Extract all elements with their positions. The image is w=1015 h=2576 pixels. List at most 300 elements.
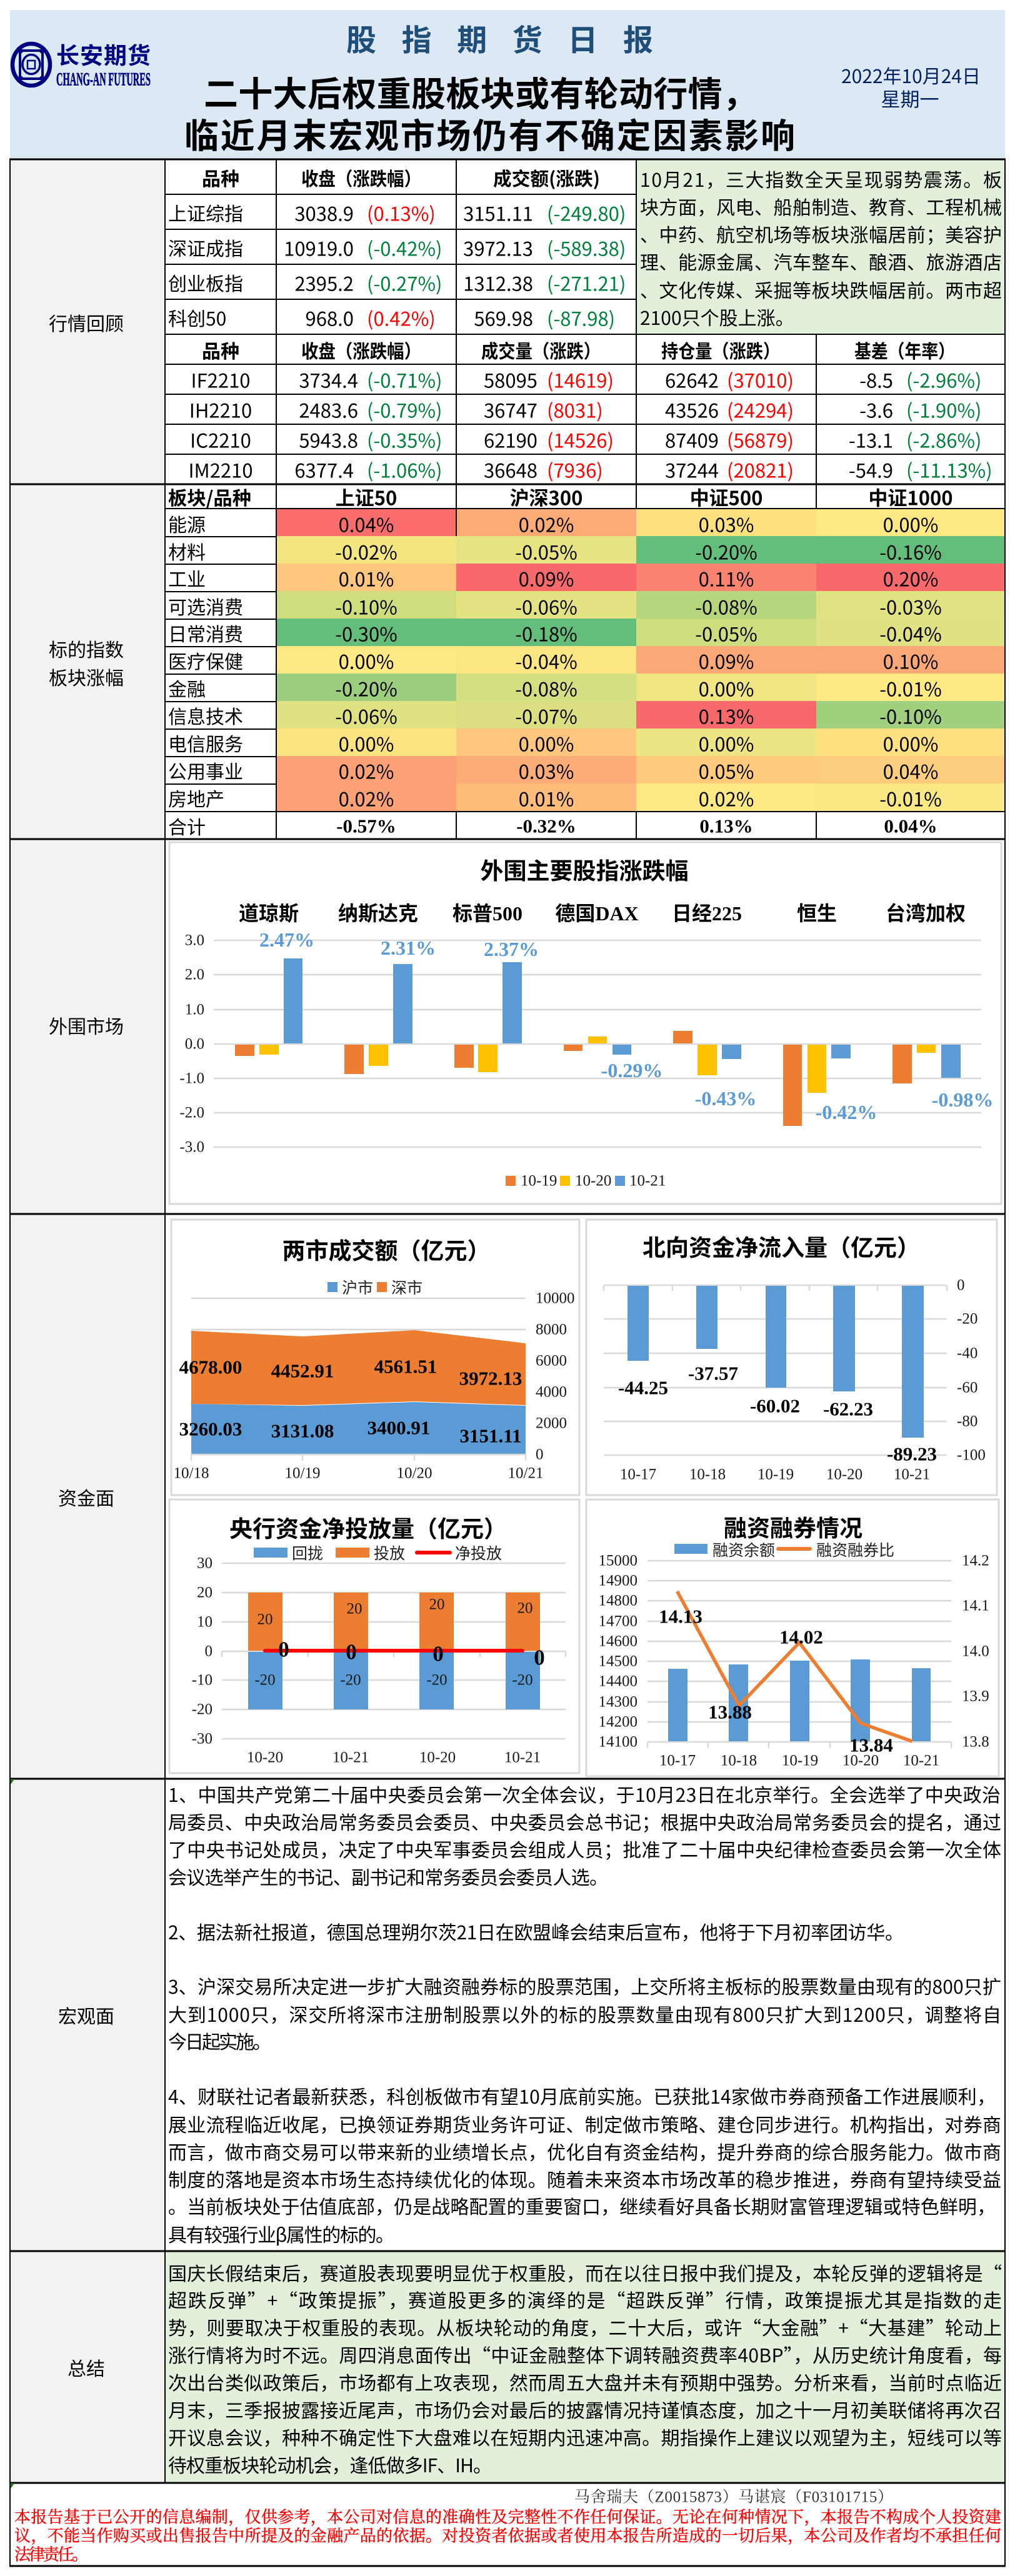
- table: indices rows: (-271.21): [547, 269, 626, 296]
- axis labels: 10-18: [689, 1466, 726, 1483]
- legend: 回拢: [292, 1541, 323, 1564]
- data labels: 0: [432, 1642, 444, 1666]
- disclaimer: 法律责任。: [14, 2542, 88, 2565]
- table: futures header: 品种: [202, 336, 239, 364]
- data labels: 13.84: [849, 1734, 893, 1756]
- heatmap row labels: 材料: [168, 537, 206, 565]
- legend: 净投放: [455, 1541, 502, 1564]
- table: indices rows: 上证综指: [168, 199, 243, 226]
- table: indices header: 收盘（涨跌幅）: [301, 164, 421, 191]
- summary text: 超跌反弹”+“政策提振”，赛道股更多的演绎的是“超跌反弹”行情，政策提振尤其是指数的走: [168, 2285, 1002, 2313]
- heatmap values: 0.10%: [883, 646, 938, 675]
- axis labels: 14100: [599, 1733, 638, 1751]
- bar chart: PBOC net injection: [169, 1499, 579, 1773]
- heatmap row labels: 能源: [168, 510, 206, 537]
- axis labels: -20: [192, 1701, 212, 1718]
- category labels: 台湾加权: [886, 902, 966, 925]
- axis labels: 14600: [599, 1633, 638, 1649]
- axis labels: 15000: [599, 1552, 638, 1569]
- legend: [328, 1276, 422, 1298]
- heatmap values: -0.08%: [515, 674, 578, 702]
- heatmap row labels: 工业: [168, 564, 206, 592]
- axis labels: 10-20: [826, 1466, 862, 1483]
- legend: [674, 1538, 894, 1561]
- table: indices rows: (-589.38): [547, 234, 626, 261]
- heatmap totals: 0.13%: [699, 815, 753, 837]
- panel: market review: [49, 159, 1005, 839]
- disclaimer: [14, 2504, 1001, 2565]
- axis labels: 0: [957, 1277, 965, 1293]
- legend: 10-19: [521, 1172, 557, 1190]
- heatmap row labels: 公用事业: [168, 757, 243, 784]
- table: indices rows: [168, 199, 626, 331]
- heatmap values: -0.16%: [879, 537, 942, 565]
- data labels: [618, 1362, 937, 1465]
- ratio line: [678, 1591, 912, 1741]
- data labels: -0.29%: [601, 1059, 662, 1082]
- axis labels: [599, 1552, 989, 1769]
- data labels: 20: [518, 1599, 532, 1617]
- data labels: -0.42%: [816, 1101, 877, 1123]
- heatmap values: 0.13%: [699, 701, 754, 730]
- heatmap values: 0.00%: [339, 729, 394, 757]
- heatmap values: 0.00%: [883, 729, 938, 757]
- axis labels: 10-21: [332, 1749, 369, 1766]
- area chart: two-market turnover: [171, 1220, 579, 1495]
- table: futures rows: (-2.96%): [906, 365, 981, 394]
- table: futures rows: 3734.4: [299, 365, 358, 394]
- legend: [506, 1172, 666, 1190]
- macro news text: 2、据法新社报道，德国总理朔尔茨21日在欧盟峰会结束后宣布，他将于下月初率团访华。: [168, 1917, 904, 1945]
- data labels: 2.31%: [381, 937, 436, 959]
- section label: sector moves: 标的指数: [49, 635, 124, 662]
- panel: sector heatmap: [49, 482, 1005, 840]
- market commentary: 10月21，三大指数全天呈现弱势震荡。板: [640, 165, 1002, 192]
- axis labels: 0: [536, 1446, 544, 1463]
- disclaimer: 议，不能当作购买或出售报告中所提及的金融产品的依据。对投资者依据或者使用本报告所造成的一切后果，本公司及作者均不承担任何: [14, 2523, 1001, 2547]
- heatmap row labels: 医疗保健: [168, 647, 243, 674]
- data labels: 4678.00: [179, 1356, 242, 1378]
- axis labels: 10-21: [894, 1466, 930, 1483]
- table: indices header: 品种: [202, 164, 239, 191]
- macro news text: 大到1000只，深交所将深市注册制股票以外的标的股票数量由现有800只扩大到1200只，调整将自: [168, 2000, 1001, 2027]
- heatmap values: 0.00%: [699, 729, 754, 757]
- summary text: [168, 2259, 1002, 2478]
- axis labels: 10/21: [508, 1465, 543, 1482]
- axis labels: 14300: [599, 1693, 638, 1711]
- panel: footer: [14, 2488, 1001, 2565]
- section label: macro: 宏观面: [58, 2001, 114, 2029]
- axis labels: 14.1: [962, 1597, 989, 1614]
- heatmap row labels: 房地产: [168, 784, 224, 812]
- category labels: 日经225: [672, 902, 742, 925]
- data labels: 3131.08: [271, 1420, 334, 1442]
- axis labels: 10-20: [842, 1752, 879, 1769]
- table: futures rows: (-1.06%): [367, 455, 442, 484]
- axis labels: 2000: [536, 1415, 567, 1432]
- data labels: -20: [340, 1672, 361, 1688]
- summary text: 待权重板块轮动机会，逢低做多IF、IH。: [168, 2450, 492, 2478]
- heatmap row labels: [168, 510, 243, 840]
- axis labels: -80: [957, 1413, 978, 1430]
- market commentary: 、中药、航空机场等板块涨幅居前；美容护: [640, 220, 1002, 247]
- y axis labels: 3.0: [185, 932, 204, 948]
- axis labels: 0: [205, 1643, 212, 1659]
- heatmap values: -0.30%: [335, 619, 398, 647]
- axis labels: 10-20: [419, 1749, 456, 1766]
- axis labels: 10-17: [620, 1466, 656, 1483]
- table: futures rows: -3.6: [859, 395, 893, 424]
- table: futures header: [202, 336, 955, 364]
- axis labels: 10-19: [758, 1466, 794, 1483]
- table: indices rows: 科创50: [168, 304, 226, 331]
- data labels: -20: [426, 1672, 448, 1688]
- heatmap values: 0.02%: [699, 783, 754, 812]
- market commentary: 理、能源金属、汽车整车、酿酒、旅游酒店: [640, 247, 1002, 275]
- macro news text: 4、财联社记者最新获悉，科创板做市有望10月底前实施。已获批14家做市券商预备工作进展顺利，: [168, 2082, 996, 2109]
- axis labels: 20: [197, 1584, 212, 1601]
- market commentary: 2100只个股上涨。: [640, 303, 794, 331]
- category labels: 纳斯达克: [338, 902, 418, 925]
- axis labels: -40: [957, 1345, 978, 1362]
- table: futures rows: -54.9: [849, 455, 893, 484]
- heatmap values: -0.01%: [879, 674, 942, 702]
- data labels: [259, 928, 993, 1123]
- macro news text: [168, 1780, 1001, 2247]
- heatmap values: -0.03%: [879, 592, 942, 620]
- data labels: [254, 1596, 545, 1688]
- legend: [254, 1541, 502, 1564]
- macro news text: 局委员、中央政治局常务委员会委员、中央委员会总书记；根据中央政治局常务委员会的提名，通过: [168, 1808, 1001, 1835]
- data labels: 2.47%: [259, 928, 314, 951]
- y axis labels: 2.0: [185, 966, 204, 983]
- axis labels: 14400: [599, 1673, 638, 1689]
- disclaimer: 本报告基于已公开的信息编制，仅供参考，本公司对信息的准确性及完整性不作任何保证。无论在何种情况下，本报告不构成个人投资建: [14, 2504, 1001, 2528]
- icon: Chang-An Futures logo: [12, 37, 151, 90]
- data labels: 0: [278, 1637, 289, 1662]
- axis labels: 13.8: [962, 1733, 989, 1751]
- data labels: 4452.91: [271, 1360, 334, 1382]
- axis labels: 10/19: [285, 1465, 320, 1482]
- table: futures rows: IF2210: [191, 365, 251, 394]
- axis labels: 10/20: [397, 1465, 432, 1482]
- data labels: [179, 1356, 522, 1447]
- heatmap totals: [336, 815, 938, 837]
- axis labels: [620, 1277, 986, 1483]
- report title: 股指期货日报: [346, 16, 653, 59]
- table: futures rows: 62642: [665, 365, 719, 394]
- axis labels: 14.2: [962, 1552, 989, 1569]
- table: futures rows: (14619): [547, 365, 614, 394]
- data labels: -0.98%: [932, 1088, 993, 1111]
- table: futures rows: 36648: [484, 455, 538, 484]
- bars 10-19: [235, 1031, 912, 1126]
- table: futures rows: (14526): [547, 425, 614, 454]
- date: [841, 61, 981, 112]
- heatmap values: -0.06%: [515, 592, 578, 620]
- heatmap row labels: 金融: [168, 674, 206, 702]
- table: futures rows: [188, 365, 992, 484]
- table: indices rows: (-0.27%): [367, 269, 442, 296]
- heatmap values: 0.02%: [339, 756, 394, 785]
- left column background: [10, 159, 165, 2483]
- heatmap values: -0.02%: [335, 537, 398, 565]
- market commentary: 块方面，风电、船舶制造、教育、工程机械: [640, 192, 1002, 220]
- macro news text: 。当前板块处于估值底部，仍是战略配置的重要窗口，继续看好具备长期财富管理逻辑或特色鲜明，: [168, 2192, 996, 2219]
- table: futures rows: IC2210: [190, 425, 251, 454]
- heatmap totals: -0.57%: [336, 815, 396, 837]
- section label: overseas markets: 外围市场: [49, 1012, 124, 1039]
- axis labels: 14200: [599, 1713, 638, 1731]
- axis labels: 14700: [599, 1613, 638, 1629]
- axis labels: -10: [192, 1672, 212, 1688]
- heatmap values: -0.01%: [879, 783, 942, 812]
- table: indices rows: 3972.13: [463, 234, 533, 261]
- table: indices rows: 1312.38: [463, 269, 533, 296]
- data labels: 13.88: [708, 1701, 752, 1723]
- macro news text: 具有较强行业β属性的标的。: [168, 2220, 394, 2247]
- summary text: 次出台类似政策后，市场都有上攻表现，然而周五大盘并未有预期中强势。分析来看，当前时点临近: [168, 2368, 1002, 2395]
- macro news text: 了中央书记处成员，决定了中央军事委员会组成人员；批准了二十届中央纪律检查委员会第一次全体: [168, 1835, 1001, 1862]
- heatmap values: 0.09%: [699, 646, 754, 675]
- table: futures header: 持仓量（涨跌）: [661, 336, 780, 364]
- heatmap values: 0.20%: [883, 564, 938, 592]
- table: indices rows: (-0.42%): [367, 234, 442, 261]
- table: futures rows: (8031): [547, 395, 603, 424]
- macro news text: 而言，做市商交易可以带来新的业绩增长点，优化自有资金结构，提升券商的综合服务能力。做市商: [168, 2137, 1001, 2165]
- category labels: 德国DAX: [555, 902, 639, 925]
- heatmap values: -0.05%: [515, 537, 578, 565]
- axis labels: 10-18: [721, 1752, 757, 1769]
- axis labels: -20: [957, 1311, 978, 1327]
- table: indices rows: 2395.2: [294, 269, 354, 296]
- chart title: 外围主要股指涨跌幅: [480, 852, 689, 886]
- table: futures rows: 37244: [665, 455, 719, 484]
- table: indices rows: 3038.9: [294, 199, 354, 226]
- table: futures header: 收盘（涨跌幅）: [301, 336, 421, 364]
- section label: capital: 资金面: [58, 1483, 114, 1511]
- heatmap values: 0.09%: [519, 564, 574, 592]
- legend: 沪市: [342, 1276, 373, 1298]
- axis labels: 4000: [536, 1383, 567, 1401]
- table: futures rows: 6377.4: [294, 455, 354, 484]
- legend: 10-21: [629, 1172, 666, 1190]
- data labels: 4561.51: [374, 1356, 437, 1377]
- table: futures rows: 62190: [484, 425, 538, 454]
- data labels: -20: [512, 1672, 533, 1688]
- bars 10-20: [259, 1037, 936, 1093]
- chart title: 北向资金净流入量（亿元）: [642, 1229, 920, 1263]
- axis labels: 8000: [536, 1321, 567, 1338]
- axis labels: 10-20: [247, 1749, 283, 1766]
- y axis labels: 1.0: [185, 1001, 204, 1018]
- table: indices rows: 968.0: [306, 304, 354, 331]
- bars: [668, 1659, 931, 1741]
- chart title: 两市成交额（亿元）: [282, 1232, 490, 1266]
- panel: overseas markets: [49, 842, 1001, 1204]
- table: futures rows: -8.5: [859, 365, 893, 394]
- table: indices rows: 深证成指: [168, 234, 243, 261]
- heatmap values: 0.00%: [699, 674, 754, 702]
- table: indices rows: 10919.0: [284, 234, 354, 261]
- data labels: 20: [258, 1611, 272, 1628]
- bars 10-21: [284, 958, 961, 1078]
- axis labels: 14800: [599, 1592, 638, 1609]
- macro news text: 展业流程临近收尾，已换领证券期货业务许可证、制定做市策略、建仓同步进行。机构指出，对券商: [168, 2110, 1001, 2137]
- table: futures rows: (7936): [547, 455, 603, 484]
- data labels: -20: [254, 1672, 276, 1688]
- section label: sector moves: 板块涨幅: [49, 663, 124, 690]
- blue bars: [248, 1652, 540, 1709]
- axis labels: -30: [192, 1731, 212, 1747]
- y axis labels: -1.0: [179, 1070, 204, 1087]
- header banner: CHANG-AN FUTURES: [56, 69, 151, 90]
- heatmap row labels: 信息技术: [168, 702, 243, 729]
- table: futures rows: -13.1: [849, 425, 893, 454]
- table: indices rows: (0.13%): [367, 199, 436, 226]
- heatmap header: 沪深300: [510, 482, 582, 511]
- data labels: -89.23: [887, 1443, 937, 1465]
- table: indices rows: 3151.11: [463, 199, 533, 226]
- macro news text: 3、沪深交易所决定进一步扩大融资融券标的股票范围，上交所将主板标的股票数量由现有的800只扩: [168, 1972, 1001, 1999]
- axis labels: -100: [957, 1447, 986, 1463]
- axis labels: 10/18: [174, 1465, 209, 1482]
- combo chart: margin financing: [586, 1499, 999, 1776]
- section label: sector moves: [49, 635, 124, 690]
- orange bars: [248, 1593, 540, 1651]
- axis labels: 14500: [599, 1653, 638, 1669]
- table: futures rows: 58095: [484, 365, 538, 394]
- heatmap header: 中证1000: [868, 482, 953, 511]
- data labels: [659, 1606, 893, 1756]
- heatmap row labels: 电信服务: [168, 729, 243, 757]
- heatmap values: 0.02%: [519, 510, 574, 537]
- summary text: 国庆长假结束后，赛道股表现要明显优于权重股，而在以往日报中我们提及，本轮反弹的逻辑将是“: [168, 2259, 1002, 2286]
- heatmap cells: [165, 509, 1005, 839]
- summary text: 势，则要取决于权重股的表现。从板块轮动的角度，二十大后，或许“大金融”+“大基建”轮动上: [168, 2313, 1002, 2340]
- heatmap values: 0.03%: [519, 756, 574, 785]
- axis labels: 10000: [536, 1290, 575, 1307]
- heatmap totals: -0.32%: [516, 815, 576, 837]
- data labels: -62.23: [823, 1398, 873, 1420]
- table: futures rows: (-0.35%): [367, 425, 442, 454]
- axis labels: -60: [957, 1380, 978, 1396]
- chart title: 融资融券情况: [724, 1509, 862, 1543]
- heatmap values: -0.07%: [515, 701, 578, 730]
- table: indices header: 成交额(涨跌): [493, 164, 600, 191]
- table: futures rows: 2483.6: [299, 395, 358, 424]
- table: futures rows: (20821): [727, 455, 794, 484]
- macro news text: 制度的落地是资本市场生态持续优化的体现。随着未来资本市场改革的稳步推进，券商有望持续受益: [168, 2165, 1001, 2192]
- heatmap values: 0.03%: [699, 510, 754, 537]
- heatmap row labels: 合计: [168, 812, 206, 840]
- category labels: 恒生: [797, 902, 837, 925]
- table: indices rows: (-87.98): [547, 304, 615, 331]
- heatmap values: 0.04%: [883, 756, 938, 785]
- heatmap values: -0.18%: [515, 619, 578, 647]
- bar chart: overseas index moves: [169, 842, 1001, 1204]
- heatmap values: 0.00%: [339, 646, 394, 675]
- macro news text: 1、中国共产党第二十届中央委员会第一次全体会议，于10月23日在北京举行。全会选举了中央政治: [168, 1780, 1001, 1808]
- section label: summary: 总结: [68, 2354, 105, 2381]
- table: futures header: 基差（年率）: [854, 336, 955, 364]
- heatmap row labels: 日常消费: [168, 619, 243, 647]
- y axis labels: 0.0: [185, 1036, 204, 1052]
- data labels: -0.43%: [695, 1087, 756, 1110]
- axis labels: 14.0: [962, 1643, 989, 1659]
- summary text: 月末，三季报披露接近尾声，市场仍会对最后的披露情况持谨慎态度，加之十一月初美联储将再次召: [168, 2395, 1002, 2423]
- heatmap values: -0.10%: [335, 592, 398, 620]
- macro news text: 今日起实施。: [168, 2027, 271, 2054]
- panel: summary: [68, 2251, 1005, 2483]
- panel: capital flows: [58, 1220, 999, 1776]
- category labels: 道琼斯: [239, 902, 299, 925]
- table: futures rows: (56879): [727, 425, 794, 454]
- table: indices header: [202, 164, 600, 191]
- authors: 马舍瑞夫（Z0015873）马谌宸（F03101715）: [574, 2488, 893, 2505]
- category labels: [239, 902, 966, 925]
- market commentary: [640, 165, 1002, 331]
- table: futures rows: (24294): [727, 395, 794, 424]
- data labels: 3400.91: [368, 1417, 430, 1438]
- section label: market review: 行情回顾: [49, 309, 124, 336]
- bars: [628, 1286, 924, 1438]
- table: indices rows: 569.98: [474, 304, 533, 331]
- bar chart: northbound net inflow: [586, 1220, 997, 1495]
- heatmap values: -0.04%: [515, 646, 578, 675]
- table: futures rows: IM2210: [188, 455, 253, 484]
- heatmap row labels: 可选消费: [168, 592, 243, 620]
- axis labels: [192, 1554, 541, 1766]
- table: futures rows: (37010): [727, 365, 794, 394]
- heatmap values: -0.20%: [335, 674, 398, 702]
- axis labels: 10: [197, 1613, 212, 1631]
- date: 星期一: [881, 84, 939, 112]
- table: futures rows: 43526: [665, 395, 719, 424]
- axis labels: 10-21: [504, 1749, 541, 1766]
- y axis labels: -2.0: [179, 1105, 204, 1121]
- table: futures rows: (-2.86%): [906, 425, 981, 454]
- legend: 10-20: [575, 1172, 611, 1190]
- table: futures rows: (-0.71%): [367, 365, 442, 394]
- heatmap header: 板块/品种: [168, 483, 251, 510]
- legend: 融资融券比: [816, 1538, 894, 1561]
- table: futures rows: (-11.13%): [906, 455, 992, 484]
- heatmap values: 0.11%: [699, 564, 754, 592]
- heatmap values: [335, 510, 942, 812]
- legend: 深市: [391, 1276, 422, 1298]
- data labels: 3151.11: [459, 1425, 522, 1447]
- table: futures rows: (-1.90%): [906, 395, 981, 424]
- summary text: 开议息会议，种种不确定性下大盘难以在短期内迅速冲高。期指操作上建议以观望为主，短线可以等: [168, 2423, 1002, 2450]
- data labels: -44.25: [618, 1377, 668, 1398]
- heatmap header: [168, 482, 953, 511]
- heatmap values: -0.05%: [695, 619, 758, 647]
- axis labels: 13.9: [962, 1688, 989, 1704]
- headline: 临近月末宏观市场仍有不确定因素影响: [184, 108, 795, 158]
- axis labels: [174, 1290, 575, 1482]
- axis labels: 30: [197, 1554, 212, 1572]
- table: futures rows: 36747: [484, 395, 538, 424]
- heatmap values: 0.01%: [339, 564, 394, 592]
- heatmap values: 0.05%: [699, 756, 754, 785]
- data labels: 14.02: [779, 1626, 823, 1648]
- table: indices rows: 创业板指: [168, 269, 243, 296]
- axis labels: 10-21: [903, 1752, 939, 1769]
- table: futures rows: 87409: [665, 425, 719, 454]
- panel: macro: [58, 1780, 1001, 2247]
- axis labels: 10-17: [659, 1752, 696, 1769]
